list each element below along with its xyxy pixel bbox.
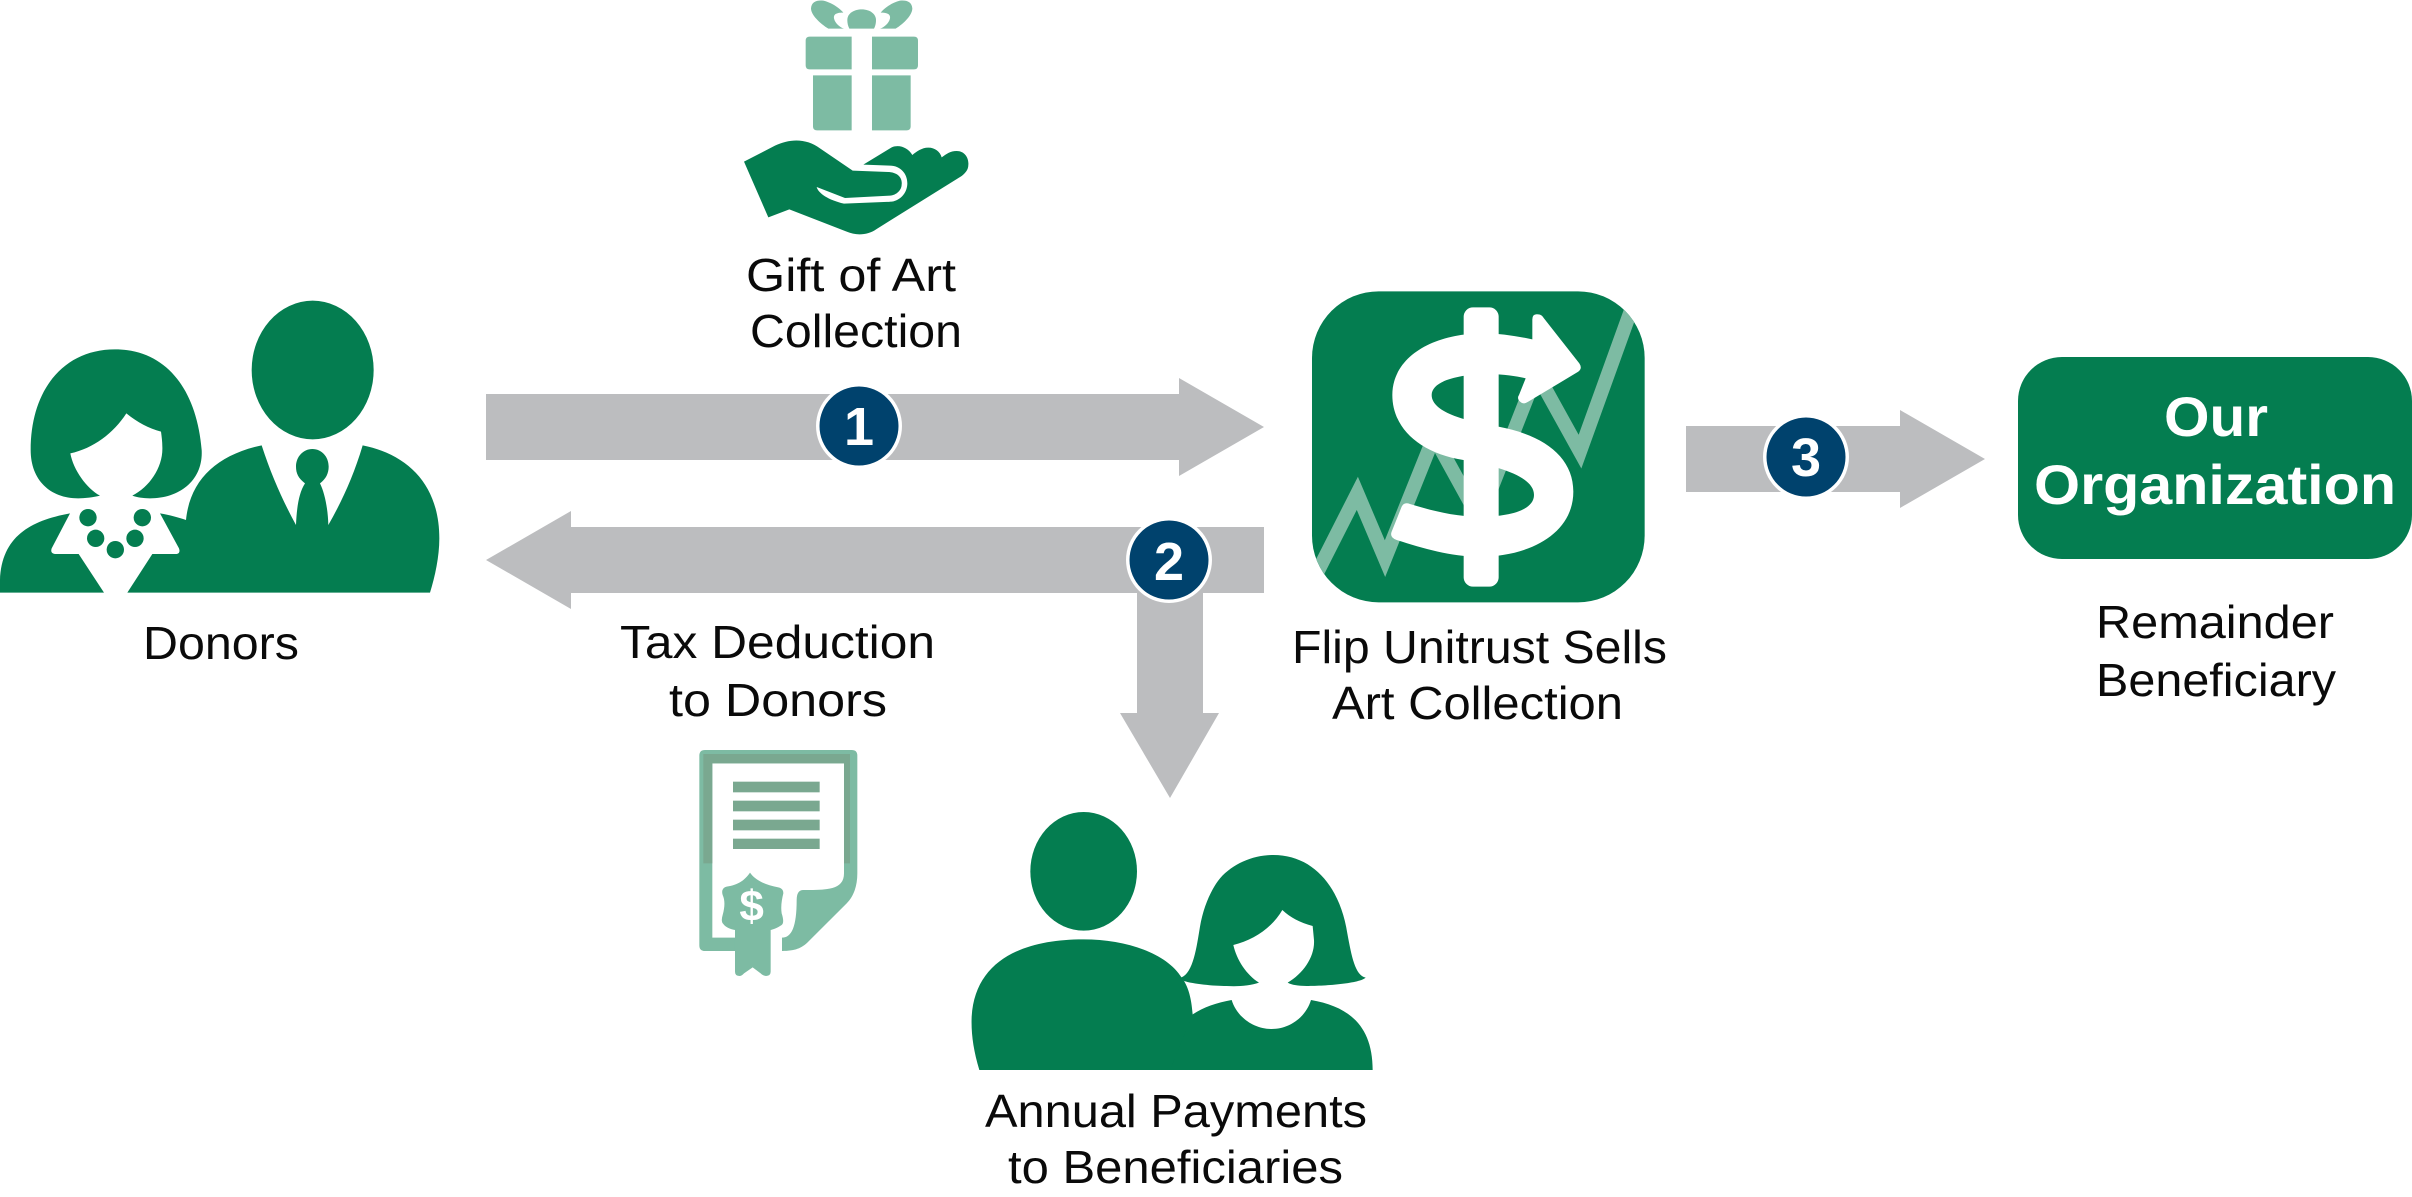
label: flip unitrust sells art collection — [1292, 621, 1667, 729]
icon: tax certificate — [699, 750, 857, 976]
label: annual payments to beneficiaries: Annual Payments — [985, 1085, 1367, 1137]
label: gift of art collection: Gift of Art — [746, 249, 956, 301]
badge: step 2: 2 — [1154, 532, 1184, 592]
label: gift of art collection: Collection — [750, 305, 962, 357]
label: remainder beneficiary — [2096, 596, 2336, 706]
panel: our organization: Our — [2164, 385, 2268, 448]
arrow: tax deduction to donors — [486, 511, 1264, 609]
icon: flip unitrust dollar and chart — [1310, 290, 1645, 602]
badge: step 3: 3 — [1791, 428, 1821, 488]
label: flip unitrust sells art collection: Flip Unitrust Sells — [1292, 621, 1667, 673]
icon: beneficiaries — [972, 812, 1373, 1070]
label: annual payments to beneficiaries — [985, 1085, 1367, 1193]
label: donors: Donors — [143, 617, 299, 669]
badge: step 3 — [1763, 414, 1849, 500]
arrow: trust to organization — [1686, 410, 1985, 508]
panel: our organization: Organization — [2034, 453, 2396, 516]
label: remainder beneficiary: Remainder — [2096, 596, 2334, 648]
label: remainder beneficiary: Beneficiary — [2096, 654, 2336, 706]
arrow: payments down to beneficiaries — [1120, 593, 1219, 798]
label: gift of art collection — [746, 249, 962, 357]
label: annual payments to beneficiaries: to Beneficiaries — [1008, 1141, 1343, 1193]
icon: tax certificate: $ — [739, 882, 764, 931]
icon: donors — [0, 301, 439, 593]
badge: step 1 — [816, 383, 902, 469]
arrow: gift to trust — [486, 378, 1264, 476]
label: tax deduction to donors — [620, 616, 935, 726]
badge: step 2 — [1126, 517, 1212, 603]
icon: gift in hand — [744, 1, 968, 234]
panel: our organization — [2018, 357, 2412, 559]
badge: step 1: 1 — [844, 397, 874, 457]
label: flip unitrust sells art collection: Art Collection — [1332, 677, 1623, 729]
label: tax deduction to donors: to Donors — [669, 674, 887, 726]
label: tax deduction to donors: Tax Deduction — [620, 616, 935, 668]
